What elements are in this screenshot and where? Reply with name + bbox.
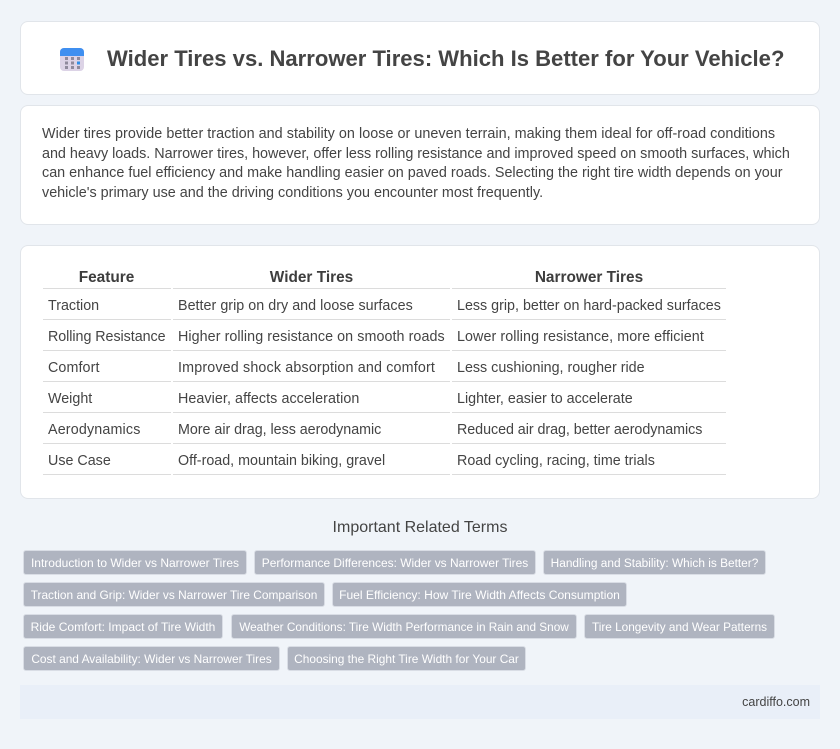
comparison table: Less cushioning, rougher ride — [457, 360, 645, 376]
related terms tags: Weather Conditions: Tire Width Performance in Rain and Snow — [239, 620, 569, 634]
related terms tags — [23, 550, 775, 671]
related terms heading: Important Related Terms — [333, 519, 507, 536]
intro text — [42, 126, 790, 201]
related terms tags: Tire Longevity and Wear Patterns — [592, 620, 767, 634]
intro text: Wider tires provide better traction and stability on loose or uneven terrain, making them ideal for off-road conditions — [42, 126, 775, 142]
comparison table: Lower rolling resistance, more efficient — [457, 329, 704, 345]
header panel — [20, 21, 820, 95]
comparison table: Comfort — [48, 360, 100, 376]
comparison table panel — [20, 245, 820, 499]
footer bar — [20, 685, 820, 719]
comparison table: Lighter, easier to accelerate — [457, 391, 633, 407]
related terms tags: Cost and Availability: Wider vs Narrower Tires — [31, 652, 272, 666]
comparison table: Less grip, better on hard-packed surfaces — [457, 298, 721, 314]
related terms tags: Traction and Grip: Wider vs Narrower Tire Comparison — [31, 588, 317, 602]
icon: calendar — [60, 48, 84, 71]
comparison table: Use Case — [48, 453, 111, 469]
comparison table: Better grip on dry and loose surfaces — [178, 298, 413, 314]
related terms tags: Introduction to Wider vs Narrower Tires — [31, 556, 239, 570]
comparison table: More air drag, less aerodynamic — [178, 422, 381, 438]
footer credit: cardiffo.com — [742, 695, 810, 709]
comparison table: Weight — [48, 391, 92, 407]
comparison table: Off-road, mountain biking, gravel — [178, 453, 385, 469]
comparison table — [43, 269, 726, 475]
related terms tags: Fuel Efficiency: How Tire Width Affects Consumption — [339, 588, 620, 602]
comparison table: Traction — [48, 298, 99, 314]
comparison table: Heavier, affects acceleration — [178, 391, 359, 407]
comparison table: Reduced air drag, better aerodynamics — [457, 422, 702, 438]
comparison table: Higher rolling resistance on smooth roads — [178, 329, 445, 345]
intro text panel — [20, 105, 820, 225]
related terms tags: Ride Comfort: Impact of Tire Width — [31, 620, 215, 634]
comparison table: Improved shock absorption and comfort — [178, 360, 435, 376]
comparison table: Aerodynamics — [48, 422, 141, 438]
related terms tags: Handling and Stability: Which is Better? — [551, 556, 758, 570]
intro text: and heavy loads. Narrower tires, however, offer less rolling resistance and improved speed on smooth surfaces, which — [42, 146, 790, 162]
intro text: vehicle's primary use and the driving conditions you encounter most frequently. — [42, 185, 543, 201]
related terms tags: Performance Differences: Wider vs Narrower Tires — [262, 556, 528, 570]
intro text: can enhance fuel efficiency and make handling easier on paved roads. Selecting the right tire width depends on your — [42, 165, 783, 181]
comparison table: Road cycling, racing, time trials — [457, 453, 655, 469]
comparison table: Wider Tires — [270, 269, 353, 286]
related terms tags: Choosing the Right Tire Width for Your Car — [294, 652, 519, 666]
comparison table: Feature — [79, 269, 134, 286]
title: Wider Tires vs. Narrower Tires: Which Is Better for Your Vehicle? — [107, 46, 784, 71]
comparison table: Narrower Tires — [535, 269, 643, 286]
comparison table: Rolling Resistance — [48, 329, 166, 345]
